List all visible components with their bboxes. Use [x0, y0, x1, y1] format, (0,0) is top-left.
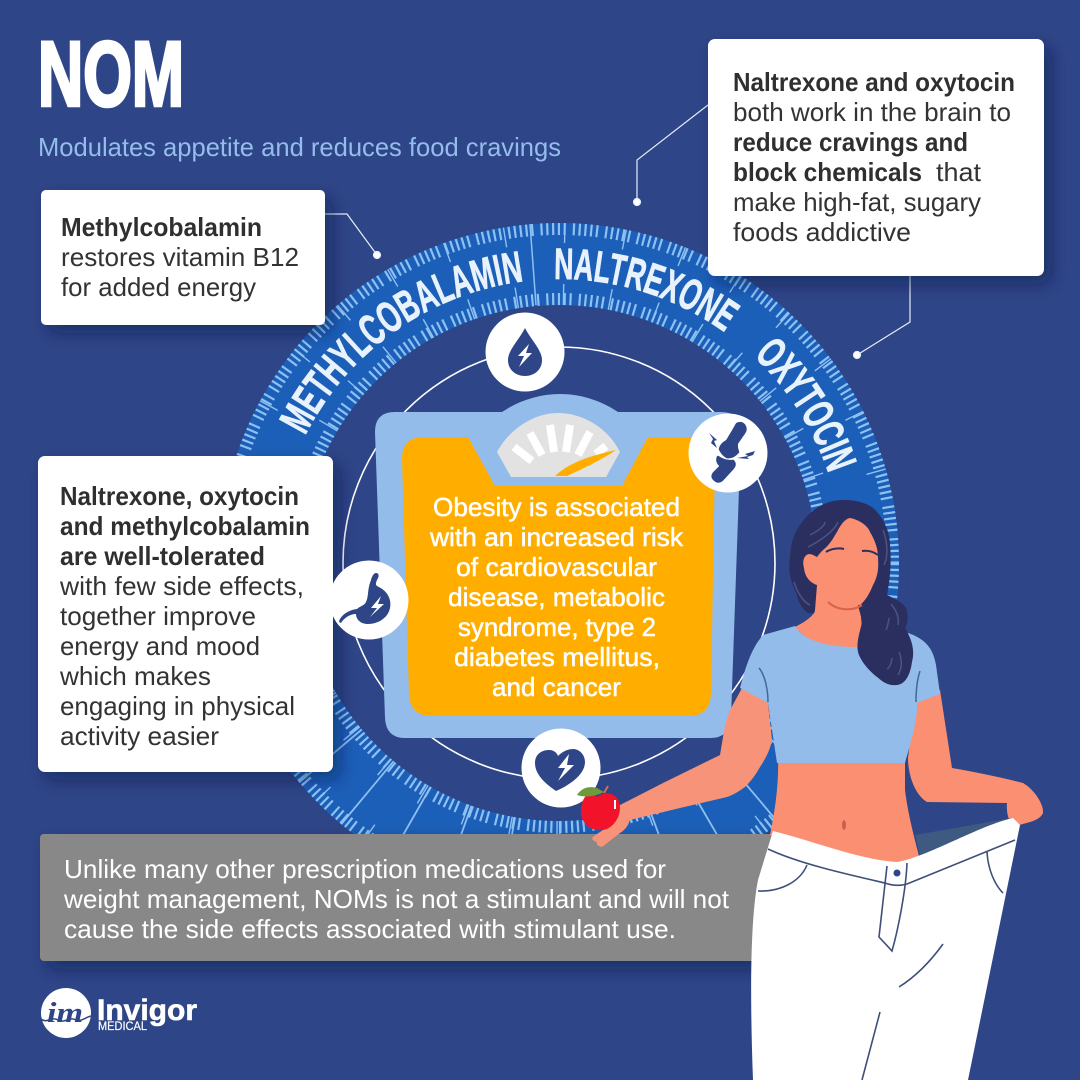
panel: methylcobalamin: Methylcobalamin — [61, 212, 262, 242]
panel: naltrexone and oxytocin: Naltrexone and oxytocin — [733, 67, 1015, 97]
scale text: syndrome, type 2 — [458, 612, 656, 642]
left arm and hand — [592, 688, 772, 847]
scale dial — [497, 413, 620, 477]
weighing scale — [375, 394, 741, 738]
panel: naltrexone and oxytocin: foods addictive — [733, 217, 911, 247]
scale text: and cancer — [492, 672, 621, 702]
logo — [41, 988, 197, 1038]
hair back — [789, 500, 913, 685]
panel: naltrexone and oxytocin: that — [936, 157, 982, 187]
scale text: disease, metabolic — [448, 582, 665, 612]
panel: naltrexone and oxytocin — [708, 39, 1044, 276]
right arm and hand — [908, 690, 1043, 826]
panel: tolerance and side effects: with few side effects, — [59, 571, 304, 601]
logo: Invigor — [97, 994, 197, 1027]
title: NOM — [38, 24, 184, 126]
panel: tolerance and side effects: engaging in physical — [60, 691, 295, 721]
circular ruler ring with drug names — [236, 223, 899, 834]
trousers — [751, 818, 1020, 1080]
scale text: Obesity is associated — [433, 492, 680, 522]
trouser lines — [758, 840, 1015, 1080]
drug name: naltrexone: NALTREXONE — [556, 248, 741, 332]
trousers inner — [915, 818, 1012, 855]
icon: stomach — [330, 560, 408, 640]
panel: tolerance and side effects: Naltrexone, oxytocin — [60, 481, 299, 511]
panel: naltrexone and oxytocin: reduce cravings and — [733, 127, 968, 157]
logo: MEDICAL — [98, 1019, 147, 1033]
icon: energy drop — [486, 312, 564, 392]
icon: heart — [522, 728, 600, 808]
scale text: of cardiovascular — [456, 552, 657, 582]
panel: methylcobalamin: for added energy — [61, 272, 256, 302]
callout: not a stimulant — [40, 834, 800, 961]
connector: naltrexone — [634, 105, 708, 206]
panel: tolerance and side effects — [38, 456, 333, 772]
hair strands and sleeve folds — [759, 522, 920, 702]
panel: tolerance and side effects: together improve — [60, 601, 256, 631]
inner white circle — [343, 347, 775, 779]
panel: tolerance and side effects: energy and mood — [60, 631, 260, 661]
belly button — [842, 820, 846, 830]
eyes and chin — [826, 548, 878, 609]
panel: tolerance and side effects: are well-tolerated — [60, 541, 265, 571]
callout: not a stimulant: weight management, NOMs is not a stimulant and will not — [63, 884, 730, 914]
drug name: methylcobalamin: METHYLCOBALAMIN — [278, 251, 522, 434]
torso — [770, 755, 920, 866]
panel: tolerance and side effects: and methylcobalamin — [60, 511, 310, 541]
connector: oxytocin — [854, 276, 910, 358]
panel: tolerance and side effects: activity easier — [60, 721, 219, 751]
connector: methylcobalamin — [325, 214, 380, 258]
callout: not a stimulant: cause the side effects associated with stimulant use. — [64, 914, 676, 944]
panel: methylcobalamin — [41, 190, 325, 325]
panel: naltrexone and oxytocin: both work in the brain to — [733, 97, 1011, 127]
logo: im — [47, 998, 83, 1029]
scale text: diabetes mellitus, — [454, 642, 660, 672]
panel: naltrexone and oxytocin: block chemicals — [733, 157, 922, 187]
shirt — [740, 626, 940, 763]
panel: methylcobalamin: restores vitamin B12 — [61, 242, 299, 272]
subtitle: Modulates appetite and reduces food cravings — [38, 132, 561, 162]
scale panel: orange — [402, 437, 715, 716]
neck and face — [795, 518, 878, 650]
hair front lock — [857, 595, 913, 685]
scale text — [429, 492, 684, 702]
scale text: with an increased risk — [429, 522, 684, 552]
panel: tolerance and side effects: which makes — [59, 661, 211, 691]
icon: joint pain — [688, 414, 768, 492]
apple — [577, 786, 620, 830]
woman illustration — [577, 500, 1043, 1080]
callout: not a stimulant: Unlike many other prescription medications used for — [64, 854, 666, 884]
drug name: oxytocin: OXYTOCIN — [758, 339, 857, 472]
panel: naltrexone and oxytocin: make high-fat, sugary — [733, 187, 981, 217]
